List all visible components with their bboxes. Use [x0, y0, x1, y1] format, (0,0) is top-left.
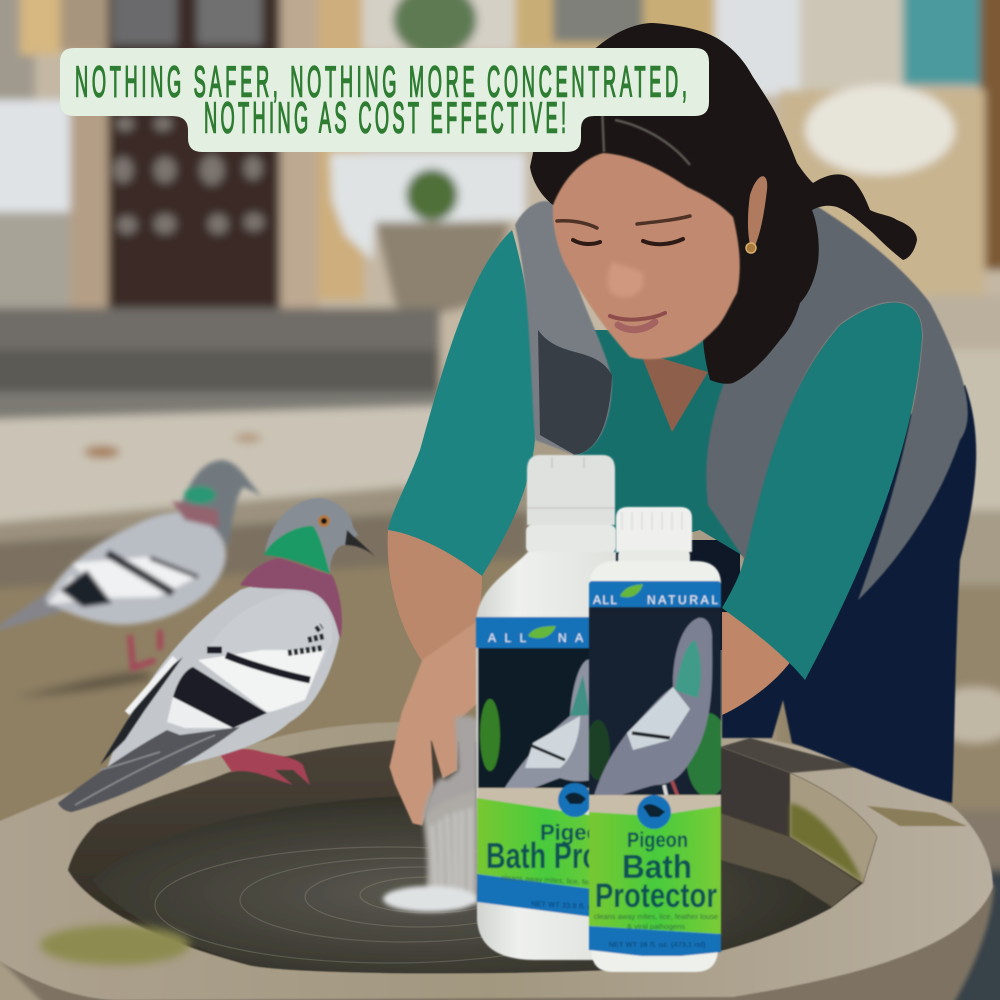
black wing patch — [173, 667, 267, 728]
small bottle band text right: NATURAL — [647, 593, 718, 607]
small bottle description line 2: & viral pathogens — [627, 922, 685, 931]
small bottle pigeon wing — [627, 687, 690, 750]
white lower wing — [167, 697, 233, 728]
right sleeve — [722, 302, 922, 680]
ear — [748, 176, 767, 252]
large bottle band text right: NA — [558, 631, 592, 645]
rim top shadow — [720, 738, 860, 773]
background pigeon tail — [0, 590, 100, 630]
trousers — [722, 385, 976, 803]
water stream — [423, 790, 478, 905]
small bottle bird badge — [637, 795, 671, 829]
large bottle photo — [477, 646, 590, 790]
small bottle pigeon neck — [675, 640, 701, 698]
ground stains — [84, 446, 120, 458]
water splash — [383, 886, 477, 912]
large bottle leaf — [528, 626, 556, 638]
eyebrows, eyes and lips — [557, 216, 690, 330]
neck green sheen — [264, 526, 330, 574]
door panels — [113, 117, 264, 234]
left forearm — [388, 530, 482, 700]
left sleeve — [388, 230, 536, 576]
woman — [388, 23, 976, 825]
left wing streaks — [100, 657, 183, 765]
background pigeon white wing bar — [72, 557, 197, 598]
background pigeon neck and head — [180, 460, 262, 548]
large bottle green panel — [476, 797, 590, 890]
wing spots — [288, 626, 325, 653]
headline callout — [60, 48, 709, 152]
small bottle neck — [618, 550, 690, 582]
black wing bar — [207, 650, 310, 680]
large bottle top band — [475, 616, 590, 650]
background pigeon black bar — [107, 553, 173, 593]
small bottle pigeon body — [592, 618, 712, 802]
face — [553, 153, 740, 359]
moss on inner wall — [790, 803, 863, 883]
large bottle product name large: Bath Prot — [486, 835, 608, 876]
neck and head — [265, 498, 358, 572]
vest right panel — [706, 180, 968, 600]
large bottle product name small: Pigeon — [540, 820, 613, 845]
vest left panel — [515, 201, 612, 455]
basin water — [92, 795, 832, 973]
small bottle product name Pigeon: Pigeon — [627, 829, 688, 852]
grey hair parting — [600, 60, 690, 165]
callout bubble — [60, 48, 709, 152]
wall reflection in water — [720, 813, 860, 907]
water dome — [423, 716, 478, 817]
hair back — [530, 23, 917, 384]
hand — [390, 622, 477, 825]
small bottle top band — [589, 581, 721, 608]
small bottle band text: ALL — [593, 593, 617, 607]
background pigeon black patch — [60, 570, 112, 607]
basin outer side — [0, 880, 994, 1000]
torso top — [540, 330, 780, 560]
body — [100, 584, 342, 790]
purple breast — [240, 558, 342, 640]
background pigeon — [0, 460, 262, 668]
large bottle net weight: NET WT 33.9 fl. oz — [531, 899, 596, 911]
large bottle band text: ALL — [488, 631, 535, 645]
earring — [746, 243, 756, 253]
large bottle pigeon — [504, 658, 590, 789]
background pigeon green neck — [184, 486, 216, 504]
right forearm — [722, 612, 795, 715]
large bottle label — [475, 616, 590, 918]
large bottle bird badge — [558, 783, 592, 817]
small bottle body — [589, 561, 721, 972]
small bottle bird icon — [643, 804, 665, 817]
small bottle sand — [589, 795, 721, 817]
water pouring from hand — [383, 716, 478, 912]
small bottle product name Protector: Protector — [595, 877, 717, 915]
small bottle product name Bath: Bath — [622, 848, 692, 885]
right inner wall dark section — [720, 747, 790, 837]
small bottle — [586, 507, 730, 972]
large bottle cap — [527, 455, 615, 525]
neck shadow — [640, 352, 708, 432]
vest dark lining — [538, 330, 612, 455]
small bottle lower band — [589, 926, 721, 958]
background pigeon body — [45, 512, 226, 625]
large bottle description: cleans away mites, lice, feather — [501, 873, 606, 887]
headline line 1: NOTHING SAFER, NOTHING MORE CONCENTRATED, — [75, 59, 687, 107]
beak — [345, 530, 376, 557]
small bottle photo — [589, 607, 721, 812]
background pigeon purple neck — [172, 501, 219, 528]
small bottle leaf — [620, 584, 643, 597]
fountain basin — [0, 722, 994, 1000]
large bottle lower band — [476, 873, 590, 918]
small bottle net weight: NET WT 16 fl. oz. (473.1 ml) — [608, 940, 706, 949]
upper wing — [207, 592, 332, 680]
tail feathers — [58, 727, 240, 812]
small bottle pigeon legs — [672, 781, 680, 802]
large bottle body — [476, 552, 616, 960]
basin stone rim — [0, 722, 993, 1000]
large bottle neck — [526, 525, 616, 553]
water ripples — [155, 847, 625, 963]
foreground pigeon — [58, 498, 376, 812]
background pigeon legs — [130, 630, 160, 668]
moss patch left — [40, 925, 190, 965]
nose shading — [608, 262, 644, 297]
headline line 2: NOTHING AS COST EFFECTIVE! — [204, 95, 566, 143]
small bottle green panel — [589, 806, 721, 934]
feet — [217, 749, 310, 785]
large bottle — [476, 455, 616, 960]
small bottle label — [586, 581, 730, 958]
stone stain right — [867, 806, 967, 826]
white wing band — [198, 650, 325, 712]
right inner wall lit section — [790, 773, 877, 883]
basin inner wall — [68, 740, 877, 973]
eye — [318, 515, 330, 527]
small bottle cap — [616, 507, 692, 552]
small bottle description line 1: cleans away mites, lice, feather louse — [594, 912, 718, 921]
dark torso underside — [610, 540, 740, 650]
large bottle sand — [478, 788, 616, 810]
